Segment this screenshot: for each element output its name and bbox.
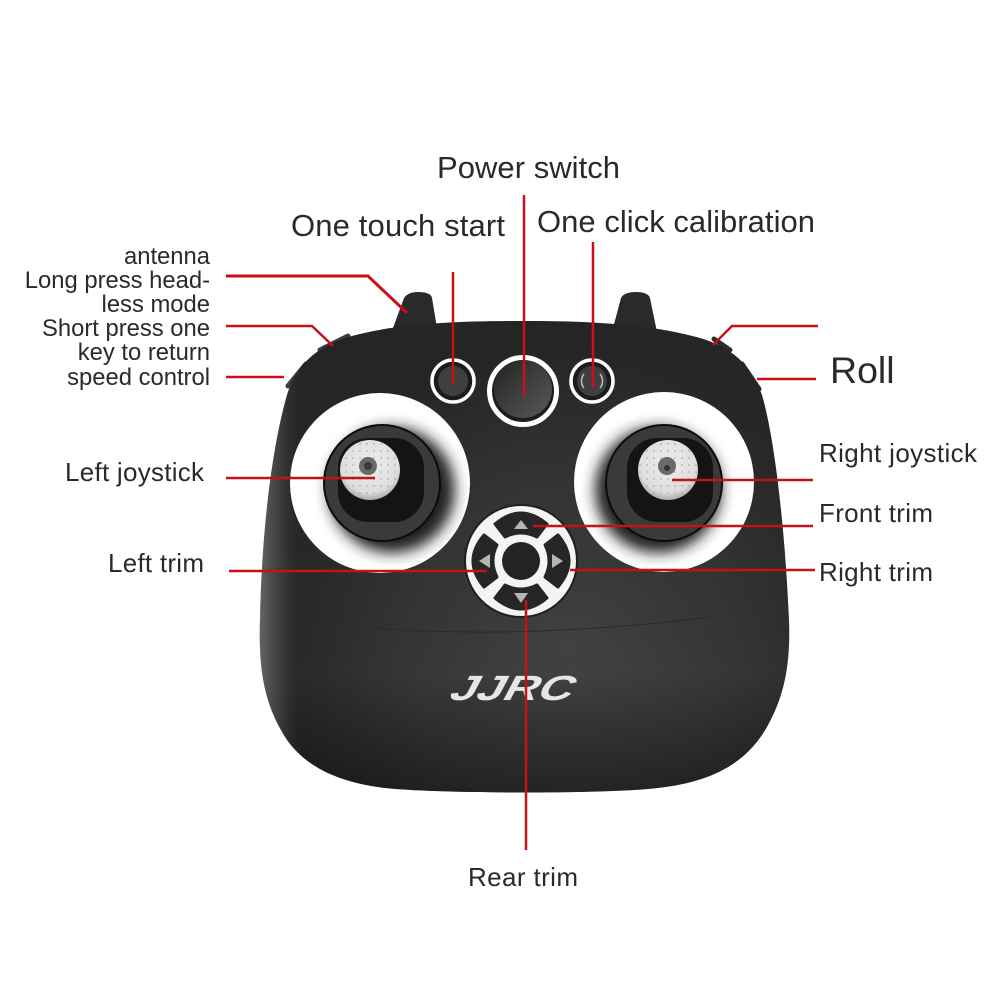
icon: front trim key bbox=[495, 513, 547, 537]
left joystick bbox=[290, 393, 470, 573]
controller body bbox=[260, 321, 789, 792]
label: left side buttons: speed control bbox=[67, 364, 210, 391]
icon: right antenna bbox=[613, 292, 657, 332]
label: Left joystick: Left joystick bbox=[65, 457, 205, 487]
label: One click calibration: One click calibration bbox=[537, 204, 815, 239]
center button bbox=[502, 542, 540, 580]
label: left side buttons: Long press head- bbox=[25, 267, 210, 294]
label: left side buttons bbox=[25, 243, 211, 391]
label: Right joystick: Right joystick bbox=[819, 438, 978, 468]
icon: arrows bbox=[479, 520, 563, 603]
icon: left trim key bbox=[473, 535, 497, 587]
label: One touch start: One touch start bbox=[291, 208, 505, 243]
icon: left antenna bbox=[393, 292, 437, 328]
label: Power switch: Power switch bbox=[437, 150, 620, 185]
label: left side buttons: Short press one bbox=[42, 315, 210, 342]
label: Front trim: Front trim bbox=[819, 498, 933, 528]
power switch button bbox=[490, 358, 556, 424]
icon: right shoulder buttons bbox=[714, 339, 759, 389]
one click calibration button bbox=[571, 360, 613, 402]
label: left side buttons: antenna bbox=[124, 243, 211, 270]
icon: left shoulder buttons bbox=[288, 336, 348, 386]
one touch start button bbox=[432, 360, 474, 402]
JJRC logo: JJRC bbox=[443, 668, 586, 707]
right joystick bbox=[574, 392, 754, 572]
label: Roll: Roll bbox=[830, 349, 895, 391]
label: left side buttons: key to return bbox=[78, 339, 210, 366]
label: Rear trim: Rear trim bbox=[468, 862, 578, 892]
label: Left trim: Left trim bbox=[108, 548, 204, 578]
icon: right trim key bbox=[545, 535, 569, 587]
label: left side buttons: less mode bbox=[102, 291, 210, 318]
icon: rear trim key bbox=[495, 585, 547, 609]
trim d-pad bbox=[464, 504, 578, 618]
red leader lines bbox=[226, 195, 818, 850]
infographic: controller diagram bbox=[26, 156, 977, 886]
label: Right trim: Right trim bbox=[819, 557, 933, 587]
